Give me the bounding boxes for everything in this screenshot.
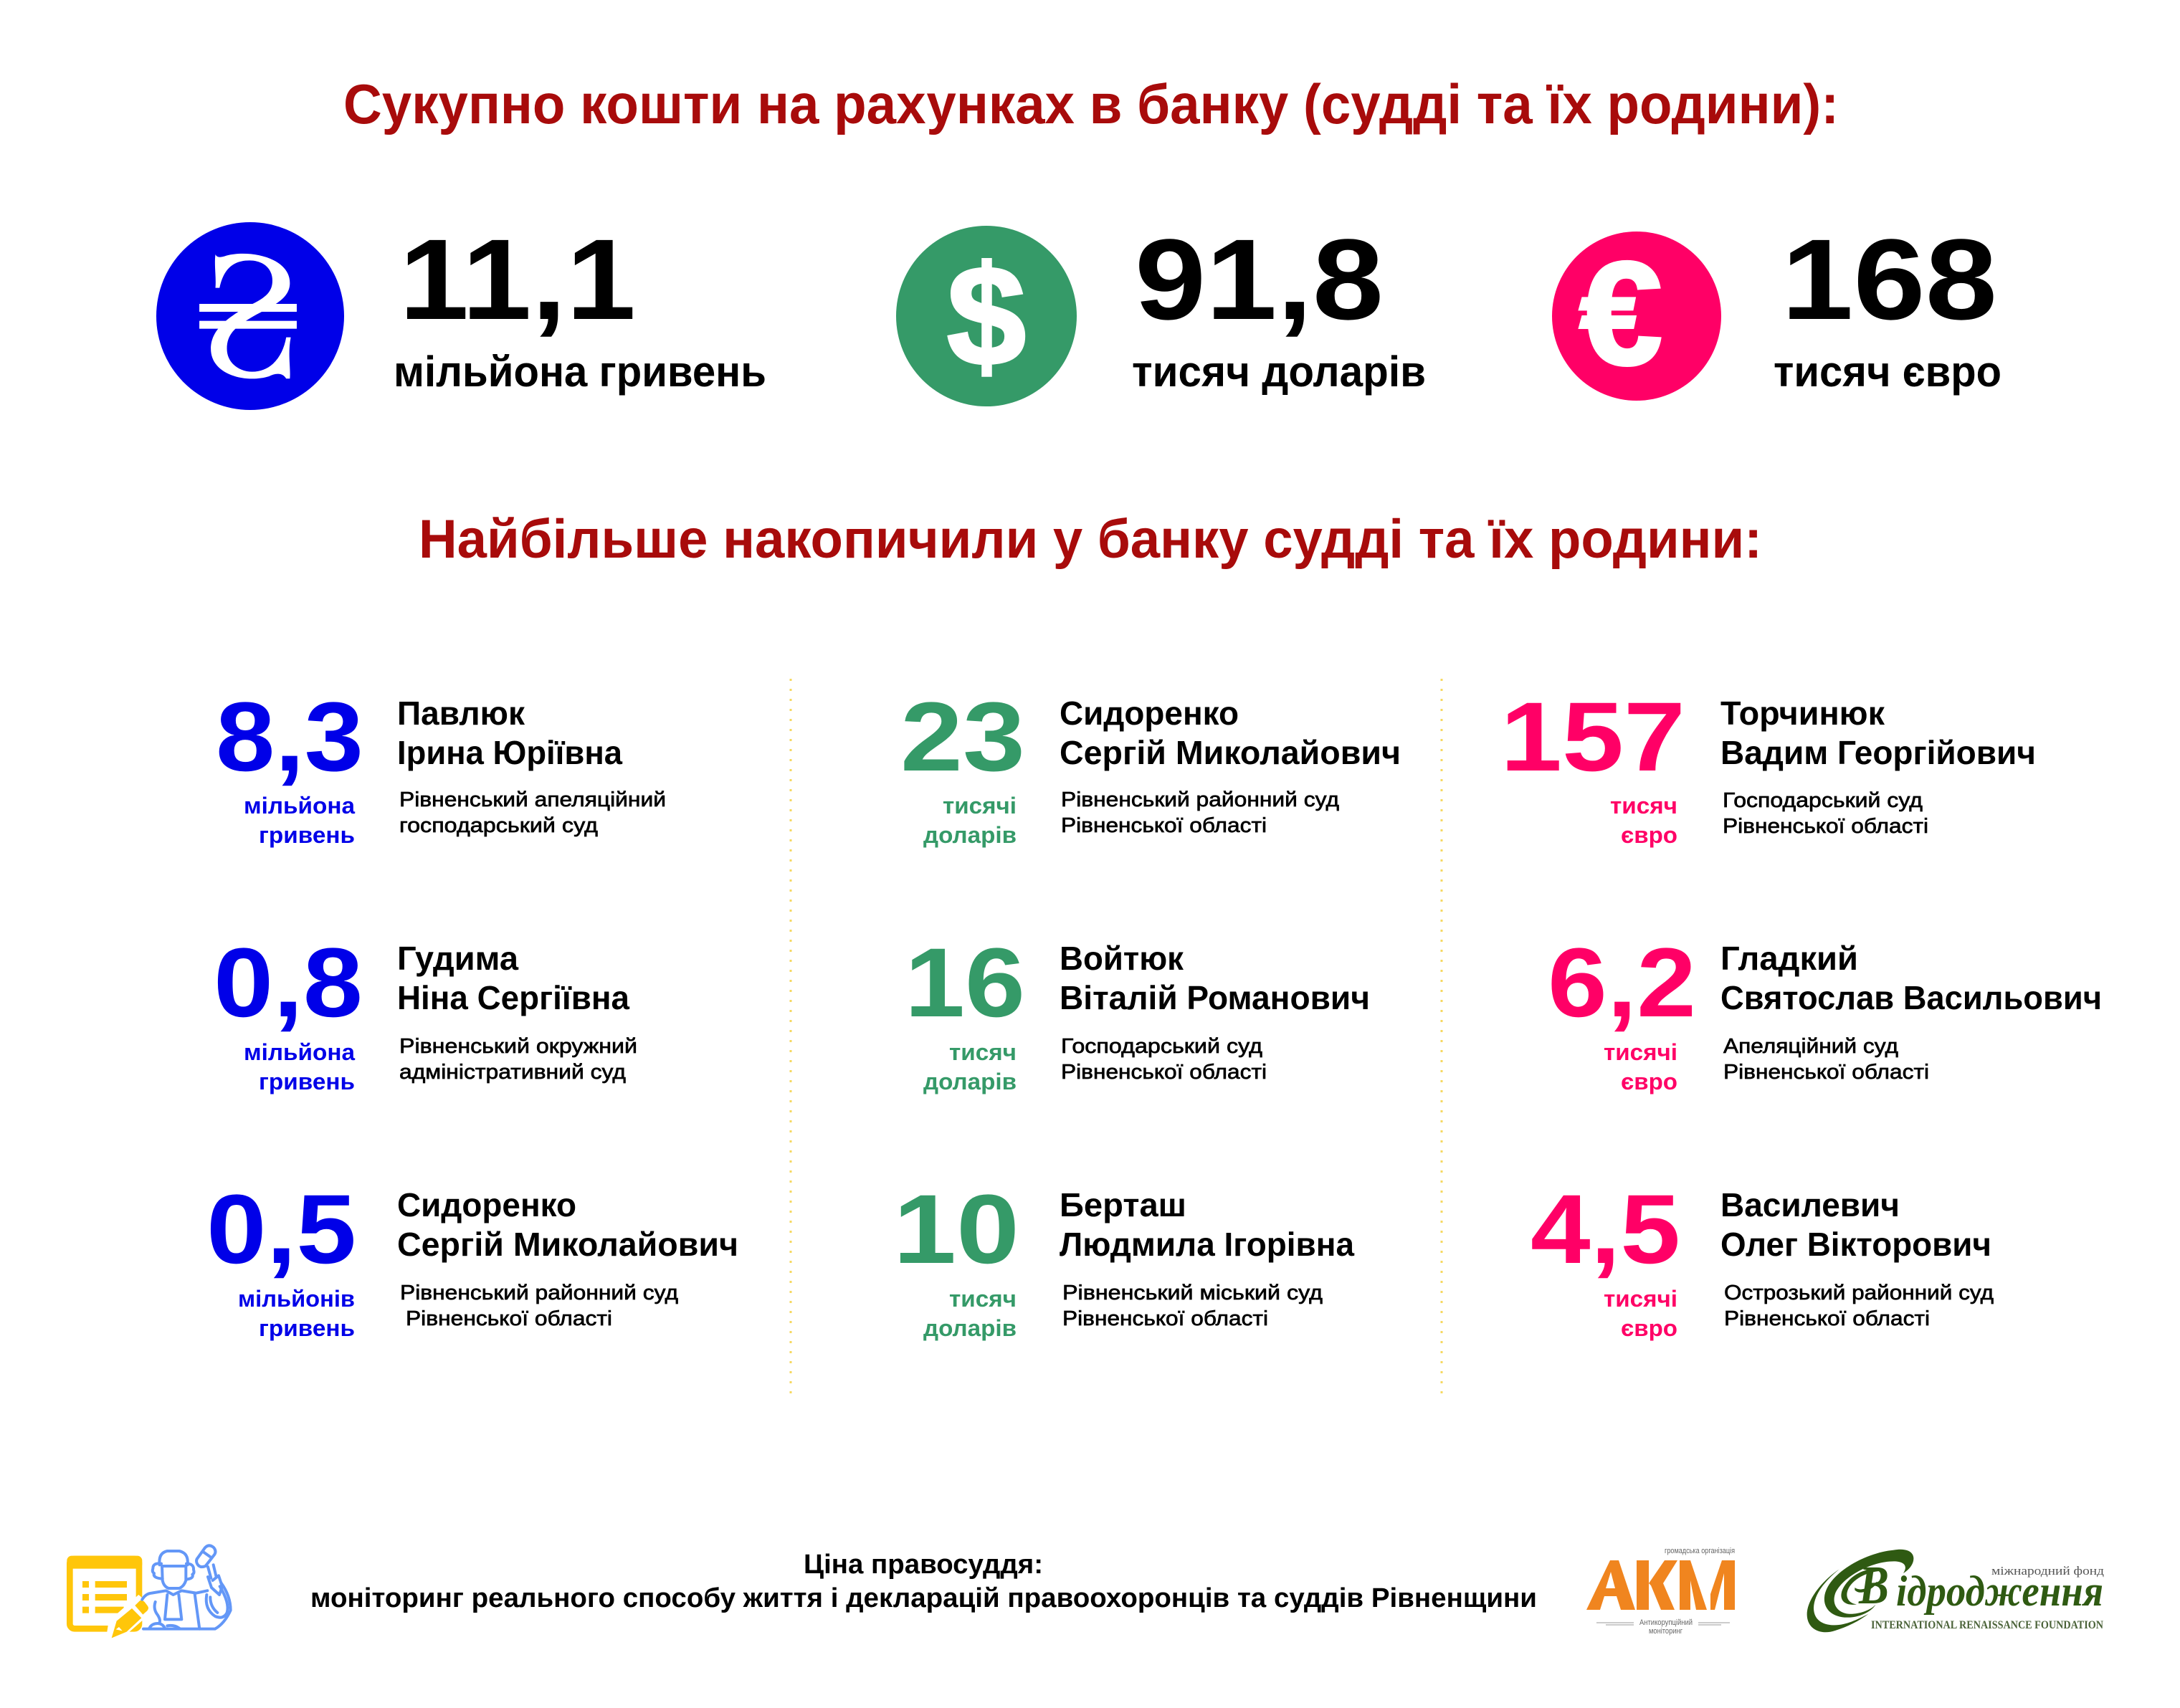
entry: Voitiuk: Войтюк bbox=[1060, 940, 1184, 977]
entry: Pavliuk: Рівненський апеляційний bbox=[399, 788, 666, 811]
entry: Hudyma: мільйона bbox=[244, 1039, 355, 1065]
entry: Sydorenko: Рівненської області bbox=[406, 1307, 612, 1330]
title: total funds: Сукупно кошти на рахунках в банку (судді та їх родини): bbox=[343, 72, 1839, 135]
logo: International Renaissance Foundation: міжнародний фонд bbox=[1991, 1564, 2104, 1578]
icon: euro coin: € bbox=[1579, 232, 1662, 396]
entry: Pavliuk: Павлюк bbox=[397, 695, 525, 732]
icon: judge with gavel bbox=[142, 1545, 231, 1629]
entry: Bertash: Берташ bbox=[1060, 1186, 1186, 1223]
entry: Torchyniuk bbox=[1500, 682, 2036, 848]
icon: hryvnia coin bbox=[156, 222, 344, 410]
entry: Sydorenko: Рівненський районний суд bbox=[1061, 788, 1339, 811]
logo: AKM: громадська організація bbox=[1665, 1547, 1735, 1555]
entry: Hladkyi: євро bbox=[1621, 1069, 1677, 1094]
entry: Hudyma: адміністративний суд bbox=[399, 1061, 626, 1084]
entry: Voitiuk: 16 bbox=[905, 928, 1025, 1038]
entry: Voitiuk: Господарський суд bbox=[1061, 1035, 1262, 1058]
entry: Hudyma bbox=[214, 928, 637, 1094]
entry: Bertash: Рівненський міський суд bbox=[1062, 1282, 1323, 1304]
heading: top savers: Найбільше накопичили у банку судді та їх родини: bbox=[419, 509, 1762, 570]
entry: Sydorenko: Сергій Миколайович bbox=[397, 1226, 738, 1263]
entry: Pavliuk: 8,3 bbox=[216, 682, 363, 792]
entry: Bertash: доларів bbox=[923, 1315, 1017, 1341]
entry: Sydorenko: гривень bbox=[259, 1315, 355, 1341]
entry: Hladkyi: Рівненської області bbox=[1723, 1061, 1929, 1084]
entry: Torchyniuk: Торчинюк bbox=[1720, 695, 1885, 732]
entry: Sydorenko: 0,5 bbox=[206, 1175, 356, 1284]
entry: Voitiuk: доларів bbox=[923, 1069, 1017, 1094]
entry: Pavliuk bbox=[216, 682, 666, 848]
entry: Hudyma: Ніна Сергіївна bbox=[397, 979, 629, 1016]
unit: тисяч доларів bbox=[1132, 348, 1426, 396]
entry: Hladkyi: Гладкий bbox=[1720, 940, 1858, 977]
logo: AKM: моніторинг bbox=[1649, 1627, 1682, 1636]
stat: euro total bbox=[1552, 215, 2001, 401]
entry: Sydorenko: мільйонів bbox=[238, 1286, 355, 1312]
entry: Vasylevych: Василевич bbox=[1720, 1186, 1900, 1223]
stat: hryvnia total bbox=[156, 215, 766, 410]
entry: Hladkyi: Святослав Васильович bbox=[1720, 979, 2102, 1016]
icon: euro coin bbox=[1552, 232, 1721, 401]
entry: Pavliuk: Ірина Юріївна bbox=[397, 734, 622, 771]
logo: International Renaissance Foundation: ідродження bbox=[1896, 1568, 2103, 1615]
entry: Vasylevych: Рівненської області bbox=[1724, 1307, 1930, 1330]
panel: dollar ranking bbox=[893, 682, 1401, 1341]
entry: Pavliuk: господарський суд bbox=[399, 814, 598, 837]
unit: мільйона гривень bbox=[394, 348, 766, 396]
entry: Hladkyi: тисячі bbox=[1604, 1039, 1677, 1065]
entry: Sydorenko: Сидоренко bbox=[1060, 695, 1239, 732]
value: 91,8 bbox=[1135, 215, 1384, 343]
logo: International Renaissance Foundation bbox=[1807, 1550, 2104, 1632]
entry: Hladkyi: Апеляційний суд bbox=[1723, 1035, 1898, 1058]
entry: Hladkyi bbox=[1548, 928, 2102, 1094]
entry: Sydorenko: Сергій Миколайович bbox=[1060, 734, 1401, 771]
entry: Sydorenko: Сидоренко bbox=[397, 1186, 576, 1223]
entry: Torchyniuk: євро bbox=[1621, 822, 1677, 848]
entry: Bertash bbox=[893, 1175, 1354, 1341]
entry: Bertash: Людмила Ігорівна bbox=[1060, 1226, 1354, 1263]
icon: checklist with pencil bbox=[67, 1556, 156, 1641]
entry: Vasylevych bbox=[1531, 1175, 1994, 1341]
entry: Pavliuk: гривень bbox=[259, 822, 355, 848]
entry: Vasylevych: Олег Вікторович bbox=[1720, 1226, 1991, 1263]
entry: Torchyniuk: Господарський суд bbox=[1723, 789, 1923, 812]
entry: Vasylevych: євро bbox=[1621, 1315, 1677, 1341]
footer caption: Ціна правосуддя: bbox=[804, 1550, 1043, 1580]
entry: Voitiuk: тисяч bbox=[949, 1039, 1017, 1065]
entry: Voitiuk: Рівненської області bbox=[1061, 1061, 1267, 1084]
entry: Sydorenko bbox=[900, 682, 1401, 848]
logo: International Renaissance Foundation: В bbox=[1858, 1555, 1889, 1616]
entry: Sydorenko bbox=[206, 1175, 738, 1341]
panel: euro ranking bbox=[1500, 682, 2102, 1341]
entry: Hladkyi: 6,2 bbox=[1548, 928, 1696, 1038]
entry: Voitiuk: Віталій Романович bbox=[1060, 979, 1370, 1016]
footer caption bbox=[310, 1550, 1537, 1613]
footer caption: моніторинг реального способу життя і декларацій правоохоронців та суддів Рівненщини bbox=[310, 1583, 1537, 1613]
entry: Pavliuk: мільйона bbox=[244, 793, 355, 819]
entry: Hudyma: Рівненський окружний bbox=[399, 1035, 637, 1058]
entry: Sydorenko: Рівненський районний суд bbox=[400, 1282, 678, 1304]
logo: International Renaissance Foundation: INTERNATIONAL RENAISSANCE FOUNDATION bbox=[1871, 1619, 2103, 1631]
entry: Vasylevych: 4,5 bbox=[1531, 1175, 1680, 1284]
entry: Torchyniuk: Вадим Георгійович bbox=[1720, 734, 2036, 771]
entry: Voitiuk bbox=[905, 928, 1370, 1094]
entry: Torchyniuk: Рівненської області bbox=[1723, 815, 1928, 838]
logo: AKM bbox=[1586, 1547, 1735, 1636]
entry: Sydorenko: Рівненської області bbox=[1061, 814, 1267, 837]
entry: Hudyma: 0,8 bbox=[214, 928, 363, 1038]
entry: Vasylevych: Острозький районний суд bbox=[1724, 1282, 1994, 1304]
stat: dollar total bbox=[896, 215, 1426, 406]
value: 168 bbox=[1781, 215, 1997, 343]
entry: Torchyniuk: тисяч bbox=[1610, 793, 1677, 819]
entry: Sydorenko: 23 bbox=[900, 682, 1025, 792]
logo: AKM: Антикорупційний bbox=[1639, 1618, 1693, 1627]
entry: Sydorenko: тисячі bbox=[943, 793, 1017, 819]
entry: Bertash: Рівненської області bbox=[1062, 1307, 1268, 1330]
unit: тисяч євро bbox=[1774, 348, 2001, 396]
panel: hryvnia ranking bbox=[206, 682, 738, 1341]
entry: Torchyniuk: 157 bbox=[1500, 682, 1685, 792]
entry: Bertash: тисяч bbox=[949, 1286, 1017, 1312]
entry: Hudyma: Гудима bbox=[397, 940, 518, 977]
value: 11,1 bbox=[399, 215, 636, 343]
entry: Sydorenko: доларів bbox=[923, 822, 1017, 848]
entry: Bertash: 10 bbox=[893, 1175, 1019, 1284]
icon: dollar coin: $ bbox=[947, 237, 1026, 395]
entry: Vasylevych: тисячі bbox=[1604, 1286, 1677, 1312]
entry: Hudyma: гривень bbox=[259, 1069, 355, 1094]
icon: dollar coin bbox=[896, 226, 1077, 406]
